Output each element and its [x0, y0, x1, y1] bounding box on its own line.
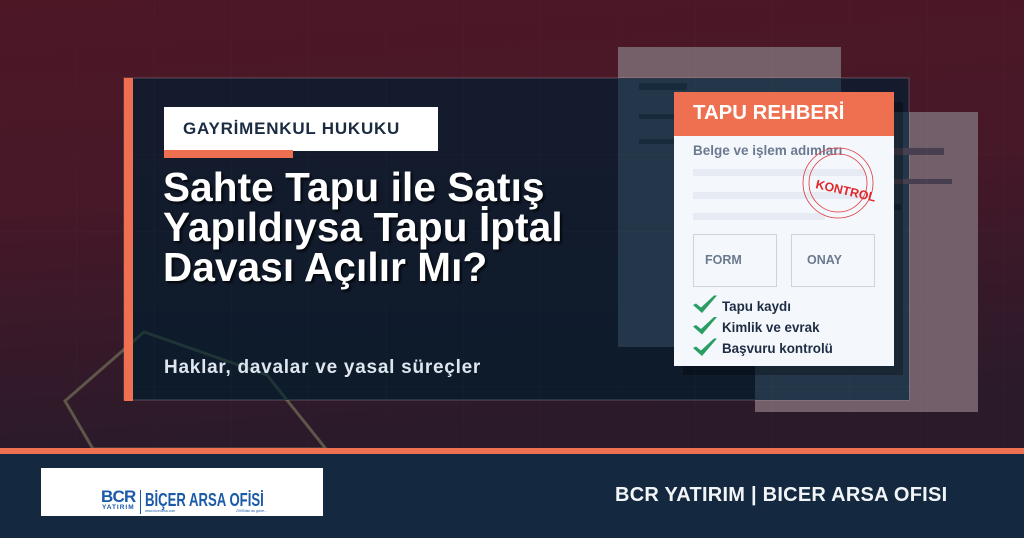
- panel: guide card: [674, 92, 894, 366]
- footer brand text: BCR YATIRIM | BICER ARSA OFISI: [615, 484, 947, 506]
- title: Sahte Tapu ile Satış: [163, 164, 545, 210]
- card header: [674, 92, 894, 136]
- title: Yapıldıysa Tapu İptal: [163, 204, 563, 250]
- checklist item: tapu kaydı: Tapu kaydı: [722, 299, 791, 314]
- checklist item: başvuru kontrolü: Başvuru kontrolü: [722, 341, 833, 356]
- logo: www.bicerarsa.com: [145, 509, 175, 513]
- orange panel accent bar: [124, 78, 133, 401]
- placeholder text line: [693, 213, 825, 220]
- title: [163, 164, 563, 292]
- form box: [693, 234, 777, 287]
- approval box: [791, 234, 875, 287]
- subtitle: Haklar, davalar ve yasal süreçler: [164, 357, 481, 378]
- logo: [41, 468, 323, 516]
- logo: 2009'dan bu güne...: [236, 509, 267, 513]
- stamp: KONTROL: [814, 177, 878, 205]
- approval box: ONAY: [807, 253, 842, 267]
- category tag: GAYRİMENKUL HUKUKU: [183, 119, 400, 138]
- placeholder text line: [693, 169, 865, 176]
- title: Davası Açılır Mı?: [163, 244, 487, 290]
- logo: BİÇER ARSA OFİSİ: [145, 490, 264, 510]
- form box: FORM: [705, 253, 742, 267]
- footer accent line: [0, 448, 1024, 454]
- category tag: [164, 107, 438, 158]
- card shadow: [683, 102, 903, 375]
- card header: TAPU REHBERİ: [693, 102, 844, 124]
- card subheading: Belge ve işlem adımları: [693, 143, 842, 158]
- placeholder text line: [693, 192, 865, 199]
- logo: YATIRIM: [102, 504, 135, 511]
- logo: BCR: [101, 487, 135, 506]
- checklist item: kimlik ve evrak: Kimlik ve evrak: [722, 320, 820, 335]
